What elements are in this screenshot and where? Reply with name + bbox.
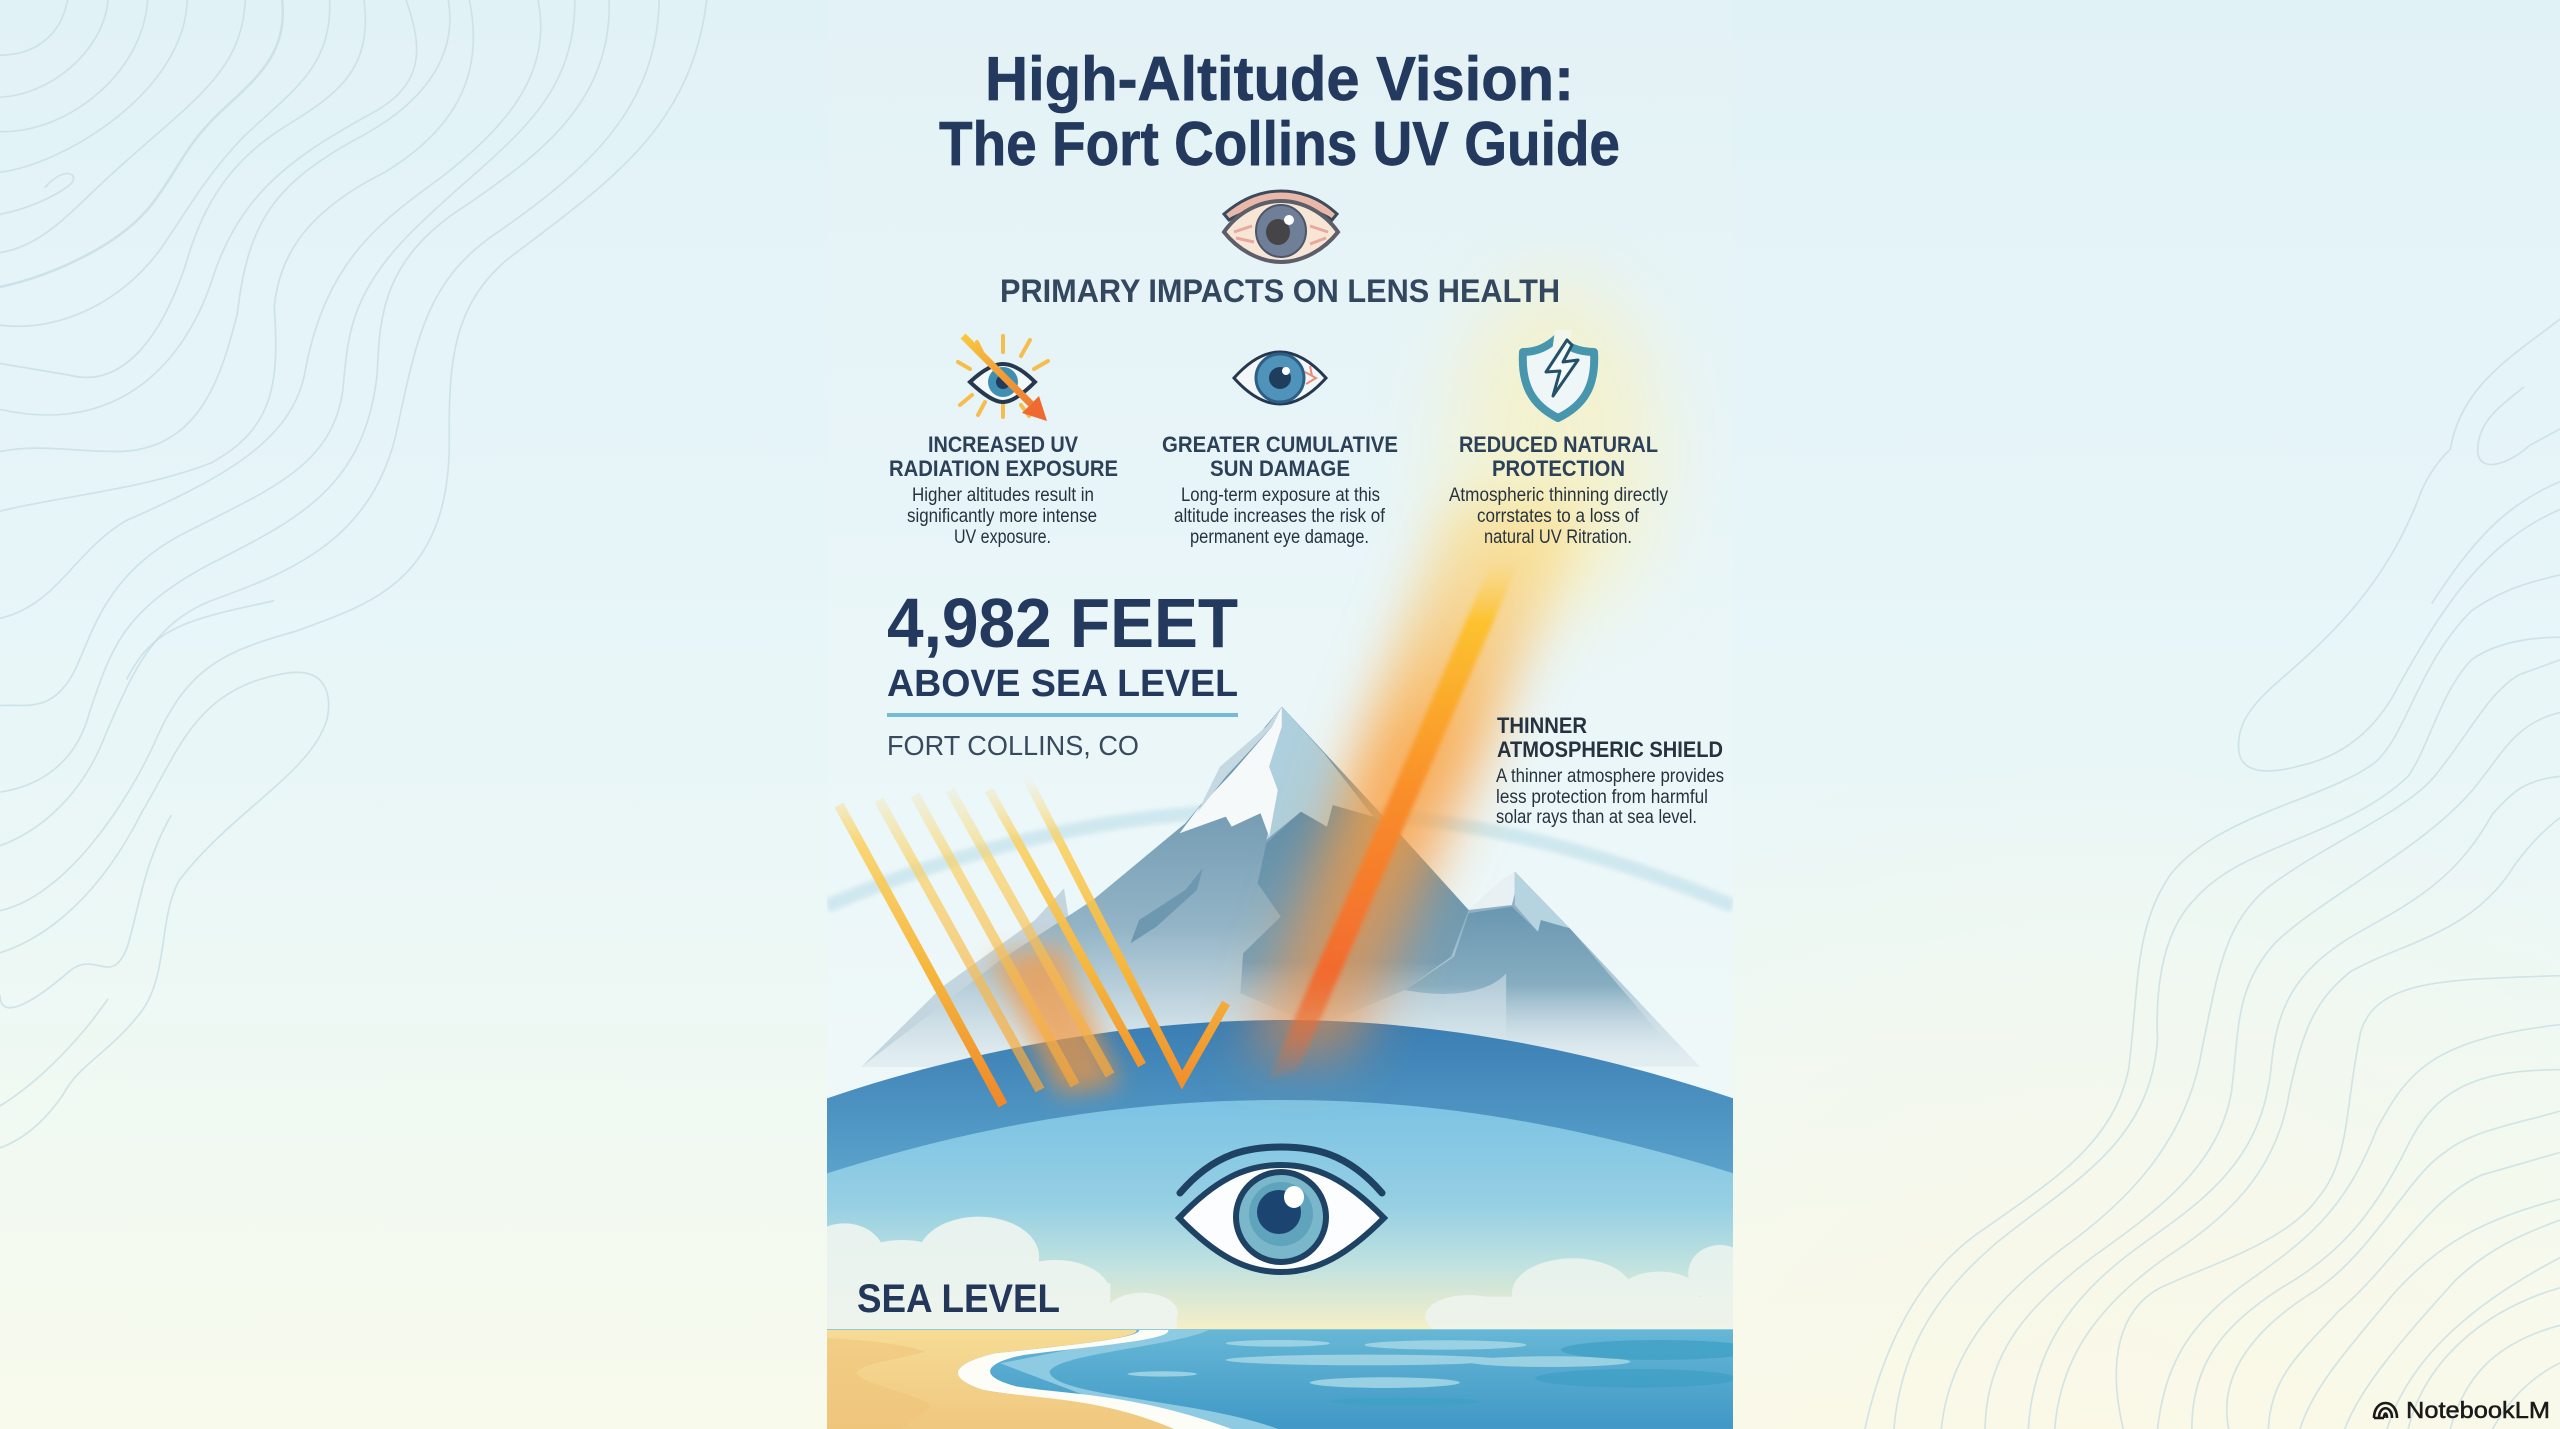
background warm corner bbox=[1300, 700, 2560, 1429]
card heading: REDUCED NATURAL bbox=[1459, 432, 1658, 457]
card body: Atmospheric thinning directly bbox=[1449, 485, 1668, 506]
card heading: GREATER CUMULATIVE bbox=[1162, 432, 1398, 457]
pupil bbox=[1257, 1190, 1301, 1234]
eye white bbox=[1179, 1165, 1384, 1272]
sand bbox=[827, 1330, 1174, 1429]
altitude number: 4,982 FEET bbox=[887, 584, 1238, 662]
snow edge shadow bbox=[1197, 707, 1282, 813]
callout: thinner atmospheric shield: A thinner atmosphere provides bbox=[1496, 766, 1724, 787]
icon: cracked shield bbox=[1523, 330, 1594, 418]
iris bbox=[1236, 1172, 1326, 1262]
iris bbox=[1256, 205, 1306, 257]
sand shade bbox=[827, 1338, 924, 1384]
title bbox=[939, 45, 1620, 179]
water highlights bbox=[1128, 1340, 1630, 1388]
card body: Higher altitudes result in bbox=[912, 485, 1094, 506]
card body: altitude increases the risk of bbox=[1174, 506, 1386, 527]
callout: thinner atmospheric shield: less protection from harmful bbox=[1496, 787, 1708, 808]
light sky dome bbox=[827, 1100, 1733, 1330]
left shaded streak bbox=[1130, 868, 1203, 943]
water darker patches bbox=[1330, 1340, 1758, 1406]
panel: infographic column bbox=[804, 0, 1758, 1429]
card heading: SUN DAMAGE bbox=[1210, 456, 1350, 481]
icon: notebook arcs bbox=[2374, 1403, 2397, 1418]
card body bbox=[1174, 485, 1386, 548]
card body: corrstates to a loss of bbox=[1477, 506, 1640, 527]
thin atmosphere arc bbox=[827, 810, 1733, 906]
foam bbox=[958, 1330, 1232, 1429]
snow cap bbox=[1180, 707, 1282, 837]
card body: significantly more intense bbox=[907, 506, 1097, 527]
card heading bbox=[889, 432, 1118, 481]
accent rule bbox=[887, 713, 1238, 717]
card heading: RADIATION EXPOSURE bbox=[889, 456, 1118, 481]
watermark: NotebookLM: NotebookLM bbox=[2406, 1397, 2550, 1423]
background: topographic contours right bbox=[1865, 319, 2560, 1429]
card: cumulative damage bbox=[1162, 352, 1398, 548]
sclera bbox=[1224, 201, 1338, 262]
above sea level: ABOVE SEA LEVEL bbox=[887, 663, 1238, 705]
clouds left bbox=[804, 1217, 1178, 1334]
small peak right face bbox=[1406, 906, 1652, 1026]
brow lid bbox=[1224, 191, 1337, 220]
icon: eye with UV ray bbox=[958, 336, 1048, 421]
clouds right bbox=[1425, 1245, 1733, 1330]
title: High-Altitude Vision: bbox=[985, 45, 1574, 114]
card body: Long-term exposure at this bbox=[1181, 485, 1380, 506]
pupil bbox=[1266, 219, 1290, 245]
location: FORT COLLINS, CO bbox=[887, 730, 1139, 761]
card heading bbox=[1162, 432, 1398, 481]
diffuse orange glow of left rays bbox=[990, 945, 1120, 1095]
card body bbox=[907, 485, 1097, 548]
dark blue outer band bbox=[827, 1020, 1733, 1174]
small peak blue side bbox=[1515, 872, 1570, 932]
mountains bbox=[862, 707, 1700, 1067]
shallow water bbox=[1000, 1330, 1278, 1429]
card body: natural UV Ritration. bbox=[1484, 527, 1632, 548]
callout: thinner atmospheric shield: solar rays than at sea level. bbox=[1496, 807, 1697, 828]
back left peak bbox=[862, 888, 1068, 1066]
icon: damaged eye bbox=[1234, 352, 1326, 404]
callout: thinner atmospheric shield bbox=[1496, 713, 1724, 828]
altitude callout bbox=[887, 584, 1238, 761]
highlight bbox=[1284, 215, 1294, 225]
right shaded face bbox=[1240, 805, 1469, 1027]
card body bbox=[1449, 485, 1668, 548]
blue dome and lower atmosphere bbox=[827, 1020, 1733, 1330]
background: topographic contours left bbox=[0, 0, 707, 1148]
card body: UV exposure. bbox=[954, 527, 1051, 548]
inner iris ring bbox=[1249, 1182, 1313, 1246]
card heading: PROTECTION bbox=[1492, 456, 1625, 481]
label: sea level: SEA LEVEL bbox=[857, 1277, 1060, 1321]
title: The Fort Collins UV Guide bbox=[939, 110, 1620, 179]
small peak snow bbox=[1469, 872, 1515, 910]
callout: thinner atmospheric shield: THINNER bbox=[1497, 713, 1587, 738]
card: reduced protection bbox=[1449, 330, 1668, 548]
yellow glow behind third card bbox=[1450, 280, 1660, 620]
main UV ray bbox=[1268, 565, 1518, 1080]
card body: permanent eye damage. bbox=[1190, 527, 1369, 548]
callout: thinner atmospheric shield: ATMOSPHERIC SHIELD bbox=[1497, 737, 1723, 762]
section heading: PRIMARY IMPACTS ON LENS HEALTH bbox=[1000, 273, 1560, 309]
main mountain body bbox=[862, 707, 1700, 1067]
orange glow behind main ray bbox=[1245, 500, 1590, 1060]
sea bbox=[827, 1329, 1733, 1429]
card heading bbox=[1459, 432, 1658, 481]
icon: large healthy eye bbox=[1179, 1147, 1384, 1272]
card heading: INCREASED UV bbox=[928, 432, 1078, 457]
card: increased UV bbox=[889, 336, 1118, 548]
red veins bbox=[1234, 226, 1328, 244]
sea level scene bbox=[804, 1217, 1758, 1429]
highlight bbox=[1284, 1186, 1304, 1208]
brow arc bbox=[1180, 1147, 1382, 1193]
snow cap shaded side bbox=[1266, 707, 1373, 840]
thin UV rays at left bbox=[839, 776, 1226, 1105]
icon: irritated eye bbox=[1224, 191, 1338, 262]
